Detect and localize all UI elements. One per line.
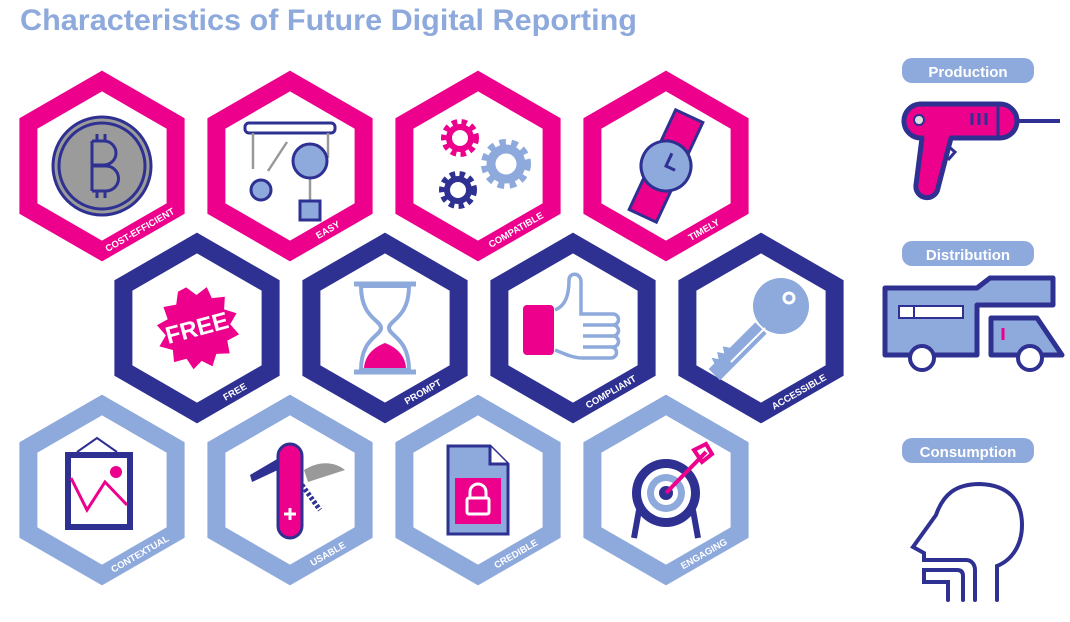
icon: free starburst: [147, 277, 248, 378]
label: FREE: [222, 381, 249, 404]
icon: thumbs up: [523, 274, 618, 358]
panel: distribution: [885, 241, 1062, 370]
icon: camper van: [885, 278, 1062, 370]
pill: distribution: Distribution: [926, 247, 1010, 264]
icon: drill: [904, 104, 1060, 198]
label: TIMELY: [687, 217, 722, 244]
icon: swiss army knife: [250, 444, 345, 538]
icon: locked document: [448, 446, 508, 534]
label: EASY: [314, 219, 343, 242]
hex: compliant: [499, 243, 647, 413]
hex: free: [123, 243, 271, 413]
hex: accessible: [687, 243, 835, 413]
icon: pulley: [245, 123, 335, 220]
hex: credible: [404, 405, 552, 575]
label: CONTEXTUAL: [109, 533, 171, 575]
pill: production: Production: [928, 64, 1008, 81]
panel: consumption: [902, 438, 1034, 600]
hex: easy: [216, 81, 364, 251]
pill: distribution: [902, 241, 1034, 266]
icon: wristwatch: [620, 106, 712, 226]
label: PROMPT: [403, 377, 444, 407]
label: CREDIBLE: [492, 538, 540, 571]
title: Characteristics of Future Digital Reporting: [20, 4, 637, 37]
label: COST-EFFICIENT: [104, 206, 177, 255]
label: ENGAGING: [679, 537, 729, 572]
panel: production: [902, 58, 1060, 198]
icon: hourglass: [354, 284, 416, 372]
label: USABLE: [309, 540, 348, 569]
label: COMPATIBLE: [487, 210, 546, 251]
icon: framed chart: [65, 438, 133, 530]
icon: free starburst: FREE: [163, 307, 232, 350]
pill: consumption: Consumption: [920, 444, 1016, 461]
hex: usable: [216, 405, 364, 575]
hex: compatible: [404, 81, 552, 251]
icon: head: [913, 484, 1022, 600]
hex: timely: [592, 81, 740, 251]
hex: engaging: [592, 405, 740, 575]
hex: prompt: [311, 243, 459, 413]
pill: production: [902, 58, 1034, 83]
icon: target with arrow: [632, 444, 712, 538]
label: ACCESSIBLE: [770, 372, 829, 413]
icon: gears: [443, 123, 526, 205]
icon: key: [704, 278, 809, 380]
label: COMPLIANT: [584, 373, 639, 411]
hex: contextual: [28, 405, 176, 575]
hex: cost-efficient: [28, 81, 177, 255]
pill: consumption: [902, 438, 1034, 463]
icon: bitcoin coin: [53, 117, 151, 215]
